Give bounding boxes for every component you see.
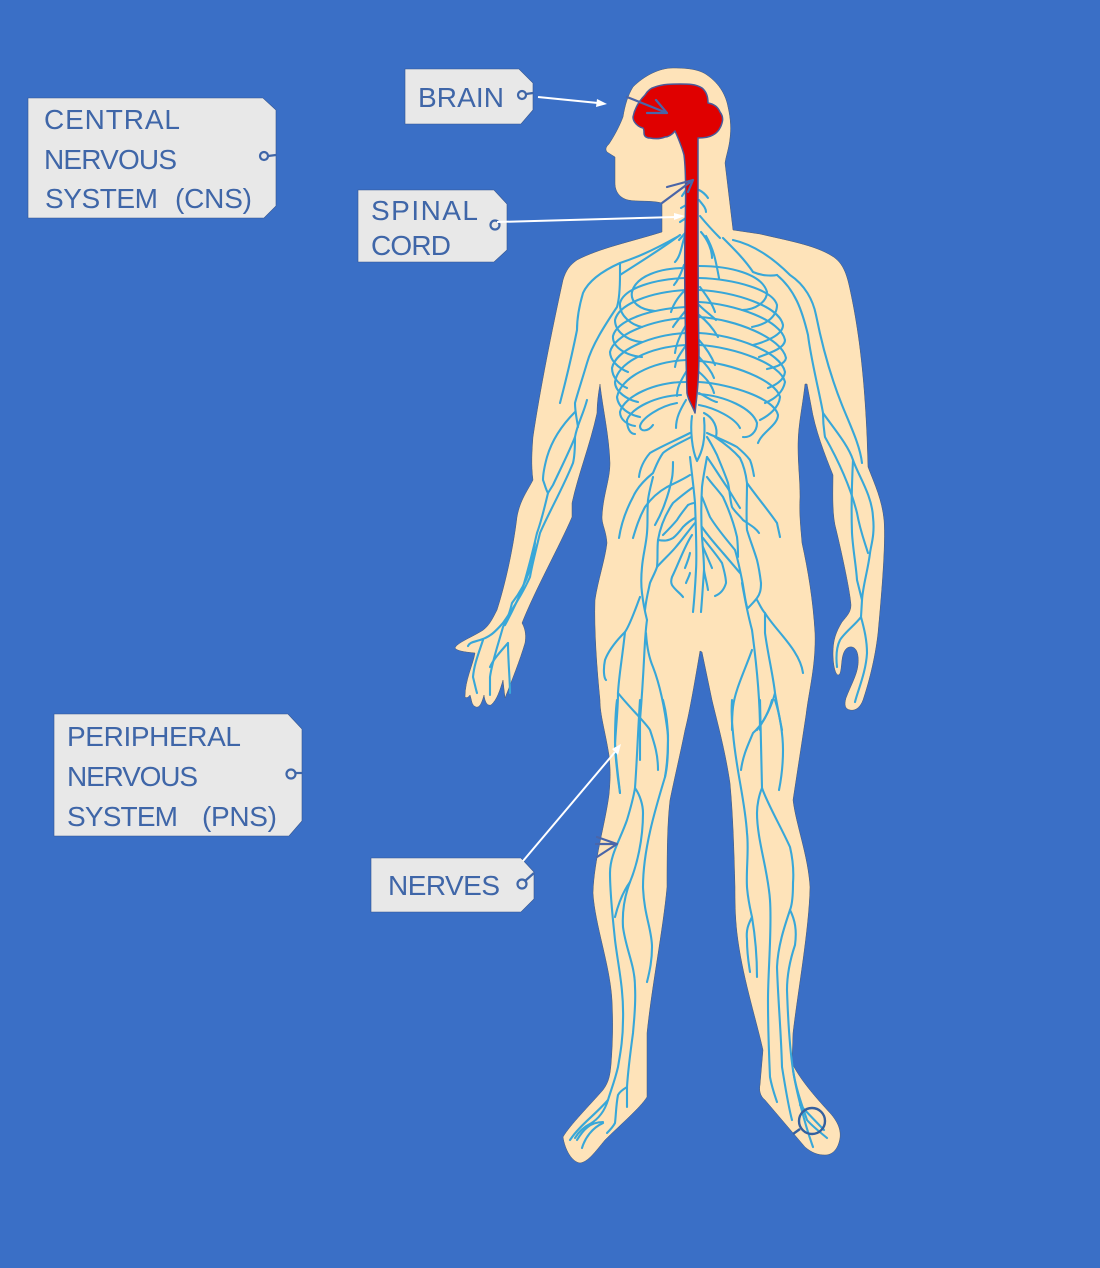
abdomen right	[707, 433, 754, 476]
spine side branches	[675, 230, 687, 262]
right arm	[723, 238, 777, 276]
right leg	[732, 700, 757, 977]
label: spinal cord: CORD	[371, 230, 451, 261]
right ribs	[699, 266, 767, 310]
arrow: spinal cord label to spinal cord	[497, 213, 685, 222]
label: peripheral nervous system: PERIPHERAL	[67, 721, 241, 752]
human body silhouette	[455, 68, 884, 1163]
icon: nerve ending circle on foot	[793, 1108, 825, 1134]
label: central nervous system: CENTRAL	[44, 104, 180, 135]
label: central nervous system: (CNS)	[175, 183, 252, 214]
label: central nervous system: SYSTEM	[45, 183, 158, 214]
left lower trunk	[640, 620, 647, 760]
label: central nervous system	[28, 98, 276, 218]
label: peripheral nervous system: SYSTEM	[67, 801, 178, 832]
arrow: neck pointer (dark)	[662, 180, 693, 203]
left leg	[615, 700, 620, 793]
label: peripheral nervous system	[54, 714, 302, 836]
neck nerves	[679, 190, 686, 240]
label: brain: BRAIN	[418, 82, 504, 113]
label: spinal cord: SPINAL	[371, 195, 478, 226]
brain and spinal cord	[633, 84, 723, 413]
arrow: brain pointer (dark)	[627, 97, 667, 113]
label: nerves	[371, 858, 534, 912]
label: peripheral nervous system: (PNS)	[202, 801, 277, 832]
arrow: brain label to brain	[538, 97, 607, 107]
left ribs	[632, 268, 685, 311]
label: spinal cord	[358, 190, 507, 262]
peripheral nerves	[468, 190, 874, 1148]
left arm	[560, 237, 677, 403]
right lower trunk	[742, 583, 760, 730]
label: peripheral nervous system: NERVOUS	[67, 761, 198, 792]
arrow: nerves label to nerve	[523, 744, 621, 861]
label: brain	[405, 69, 533, 124]
central V	[691, 416, 705, 461]
left foot	[607, 1087, 627, 1133]
label: nerves: NERVES	[388, 870, 500, 901]
label: central nervous system: NERVOUS	[44, 144, 177, 175]
abdomen left	[639, 433, 690, 477]
arrow: knee pointer (dark)	[596, 837, 617, 857]
